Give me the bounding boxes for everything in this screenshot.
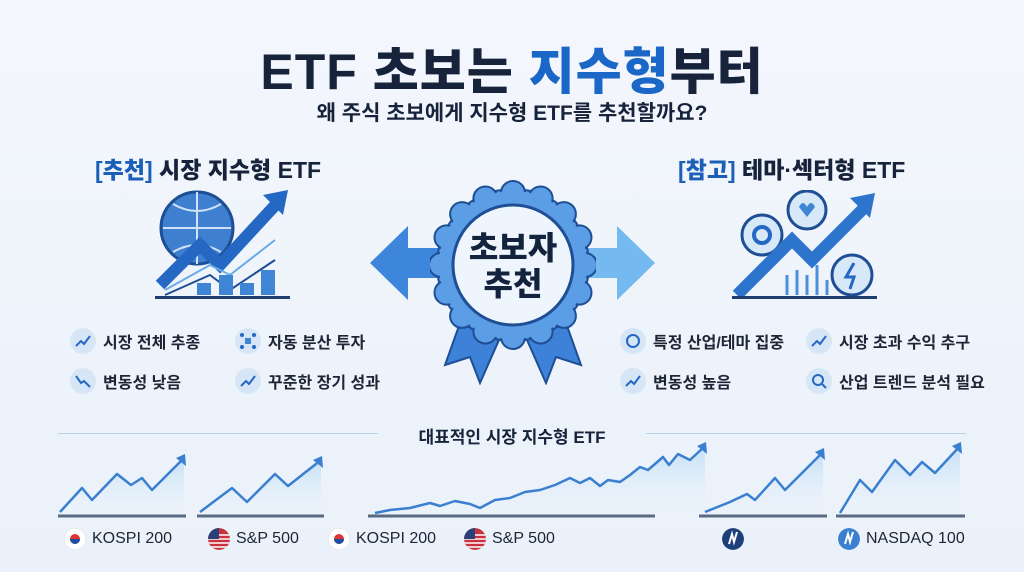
- title: ETF 초보는 지수형부터: [260, 44, 764, 100]
- icon: theme sectors chart: [732, 190, 877, 300]
- right features: [620, 328, 784, 354]
- left features: 시장 전체 추종: [103, 335, 200, 352]
- right heading: [참고] 테마·섹터형 ETF: [678, 157, 905, 183]
- subtitle: 왜 주식 초보에게 지수형 ETF를 추천할까요?: [317, 102, 707, 125]
- text: 자동 분산 투자: [268, 335, 365, 352]
- bottom section heading: 대표적인 시장 지수형 ETF: [418, 428, 606, 447]
- labels: KOSPI 200: [92, 530, 172, 547]
- text: NASDAQ 100: [866, 530, 965, 547]
- badge: 초보자: [469, 230, 557, 266]
- text: S&P 500: [236, 530, 299, 547]
- left heading: [추천] 시장 지수형 ETF: [95, 157, 321, 183]
- text: 꾸준한 장기 성과: [268, 375, 380, 392]
- icon: globe chart: [155, 190, 290, 299]
- badge: [430, 180, 596, 385]
- text: 산업 트렌드 분석 필요: [839, 375, 985, 392]
- mini charts: [58, 442, 965, 518]
- text: 시장 초과 수익 추구: [839, 335, 970, 352]
- labels: [64, 528, 172, 550]
- badge: 추천: [484, 266, 542, 302]
- arrow: right: [588, 226, 655, 300]
- left features: [70, 328, 200, 354]
- text: KOSPI 200: [356, 530, 436, 547]
- text: 변동성 낮음: [103, 375, 181, 392]
- arrow: left: [370, 226, 438, 300]
- right features: 특정 산업/테마 집중: [653, 335, 784, 352]
- text: S&P 500: [492, 530, 555, 547]
- text: 변동성 높음: [653, 375, 731, 392]
